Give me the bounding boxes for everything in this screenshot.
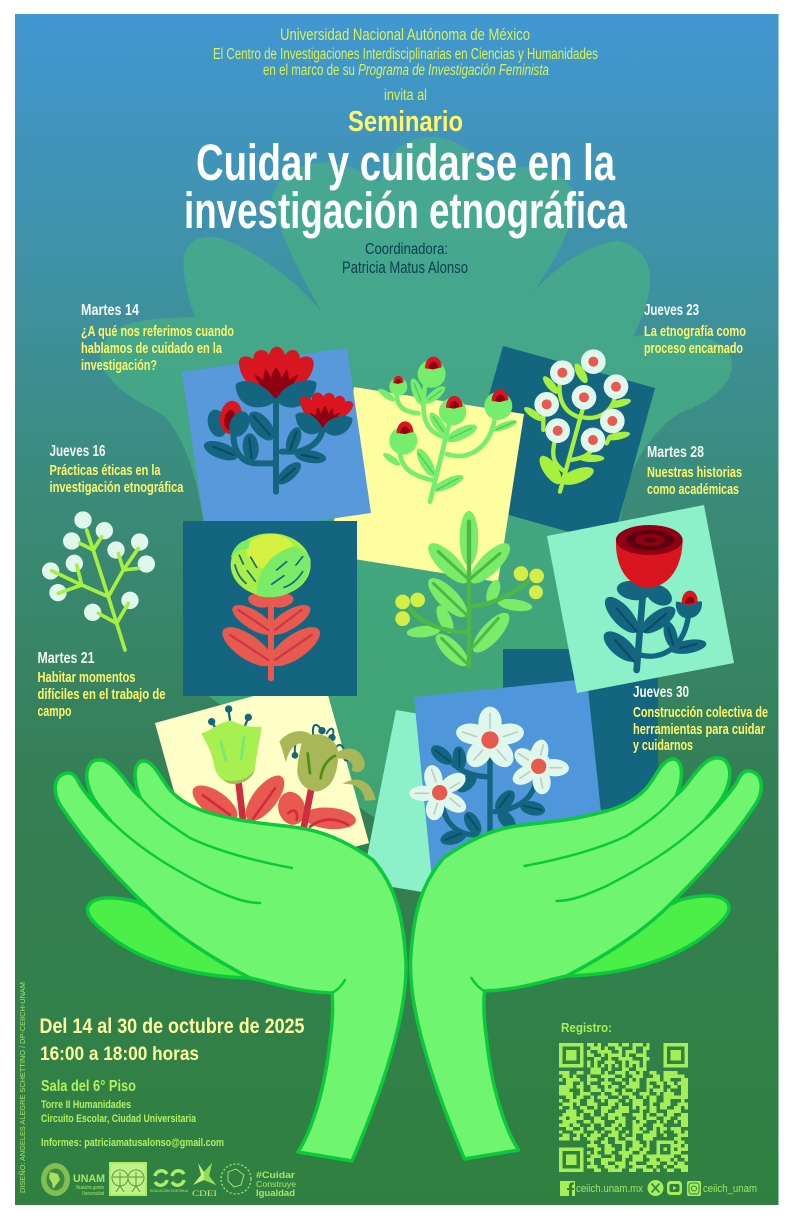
illustration: white branch with lime stems [42, 511, 155, 650]
main title [184, 134, 627, 239]
logo: UNAM wordmark: Universidad [82, 1191, 105, 1197]
card: mint lower [362, 710, 560, 910]
illustration: green buds [377, 357, 518, 502]
session: Jueves 30 [633, 684, 768, 754]
icon: YouTube [667, 1181, 682, 1195]
session: Martes 21: difíciles en el trabajo de [38, 686, 166, 703]
card: dark behind blue [503, 649, 658, 809]
header institution text: El Centro de Investigaciones Interdisciplinarias en Ciencias y Humanidades [213, 46, 598, 63]
card: mint rose [547, 505, 734, 693]
social handle: ceiich_unam [703, 1183, 757, 1195]
header institution text: en el marco de su Programa de Investigación Feminista [263, 62, 549, 79]
card: yellow [329, 387, 524, 582]
date and time: Del 14 al 30 de octubre de 2025 [40, 1015, 305, 1038]
card: navy cabbage flower [183, 521, 357, 696]
registration label: Registro: [561, 1020, 612, 1035]
session: Jueves 30: y cuidarnos [633, 737, 693, 754]
illustration: white round flowers [522, 349, 632, 492]
card: dark behind white flowers [459, 346, 655, 544]
illustration: red flowers [201, 347, 353, 492]
logo: UNAM seal [41, 1163, 70, 1196]
header institution text: Universidad Nacional Autónoma de México [280, 25, 530, 44]
logo: hashtag campaign: Igualdad [256, 1188, 295, 1199]
logo: UNAM wordmark: UNAM [73, 1173, 105, 1185]
logo: hashtag campaign: #Cuidar [256, 1170, 295, 1181]
logo: UNAM wordmark: Nuestra gente [76, 1185, 104, 1191]
main title: investigación etnográfica [184, 182, 627, 239]
main title: Cuidar y cuidarse en la [196, 134, 615, 191]
QR code [559, 1045, 688, 1170]
header institution text: invita al [384, 87, 427, 104]
logo: hashtag campaign [256, 1170, 296, 1199]
card: tulips [155, 677, 369, 889]
venue: Sala del 6° Piso [41, 1078, 136, 1095]
coordinator: Patricia Matus Alonso [342, 259, 468, 277]
vertical design credit: DISEÑO: ANGELES ALEGRE SCHETTINO / DP-CEIICH-UNAM [18, 982, 27, 1193]
session: Martes 28: como académicas [647, 481, 739, 498]
session: Jueves 23: La etnografía como [644, 323, 746, 340]
illustration: red rose [599, 525, 708, 670]
session: Jueves 23: proceso encarnado [644, 340, 743, 357]
session: Martes 14: ¿A qué nos referimos cuando [81, 323, 234, 340]
coordinator [342, 241, 468, 277]
session: Martes 21: campo [38, 703, 72, 720]
illustration: cabbage flower [216, 533, 326, 678]
icon: Instagram [687, 1181, 701, 1196]
session: Jueves 23 [644, 302, 746, 357]
logo: continuing education arrows [150, 1171, 188, 1193]
session: Martes 28: Nuestras historias [647, 464, 742, 481]
illustration: green plant with berries [395, 511, 544, 671]
date and time: 16:00 a 18:00 horas [40, 1043, 199, 1065]
logo: CDEI: CDEI [192, 1188, 217, 1198]
left hand [55, 760, 406, 1161]
venue [41, 1078, 224, 1149]
venue: Informes: patriciamatusalonso@gmail.com [41, 1137, 224, 1149]
logo: hashtag campaign: Construye [256, 1179, 296, 1189]
session: Jueves 30: Jueves 30 [633, 684, 689, 701]
session: Jueves 16: Prácticas éticas en la [50, 462, 161, 479]
session: Martes 14 [81, 302, 234, 374]
seminar label: Seminario [348, 106, 463, 138]
coordinator: Coordinadora: [365, 241, 448, 258]
logo: dotted circle emblem [221, 1164, 251, 1194]
session: Martes 21: Habitar momentos [38, 669, 136, 686]
session: Jueves 23: Jueves 23 [644, 302, 699, 319]
card: blue white flowers [414, 679, 606, 880]
session: Martes 28: Martes 28 [647, 444, 704, 461]
logo: UNAM wordmark [73, 1173, 105, 1197]
session: Jueves 16: Jueves 16 [50, 443, 106, 460]
icon: facebook [560, 1181, 575, 1196]
session: Martes 14: hablamos de cuidado en la [81, 340, 222, 357]
logo: square program emblem [109, 1162, 147, 1196]
card: blue red flowers [182, 348, 371, 537]
session: Jueves 16: investigación etnográfica [50, 479, 184, 496]
illustration: tulips [187, 705, 376, 831]
logo: continuing education arrows: EDUCACIÓN CONTINUA [150, 1188, 188, 1193]
session: Martes 14: Martes 14 [81, 302, 139, 319]
logo: CDEI [192, 1163, 217, 1198]
session: Martes 21: Martes 21 [38, 650, 95, 667]
venue: Circuito Escolar, Ciudad Universitaria [41, 1113, 197, 1125]
illustration: white five-petal flowers [409, 707, 569, 848]
session: Martes 21 [38, 650, 166, 720]
header institution text [213, 25, 598, 104]
session: Jueves 16 [50, 443, 184, 496]
venue: Torre II Humanidades [41, 1099, 131, 1111]
background leaf shape [100, 137, 732, 830]
session: Martes 28 [647, 444, 742, 498]
web address: ceiich.unam.mx [576, 1183, 643, 1195]
icon: X [648, 1180, 664, 1196]
right hand [410, 758, 761, 1159]
session: Martes 14: investigación? [81, 357, 157, 374]
date and time [40, 1015, 305, 1065]
